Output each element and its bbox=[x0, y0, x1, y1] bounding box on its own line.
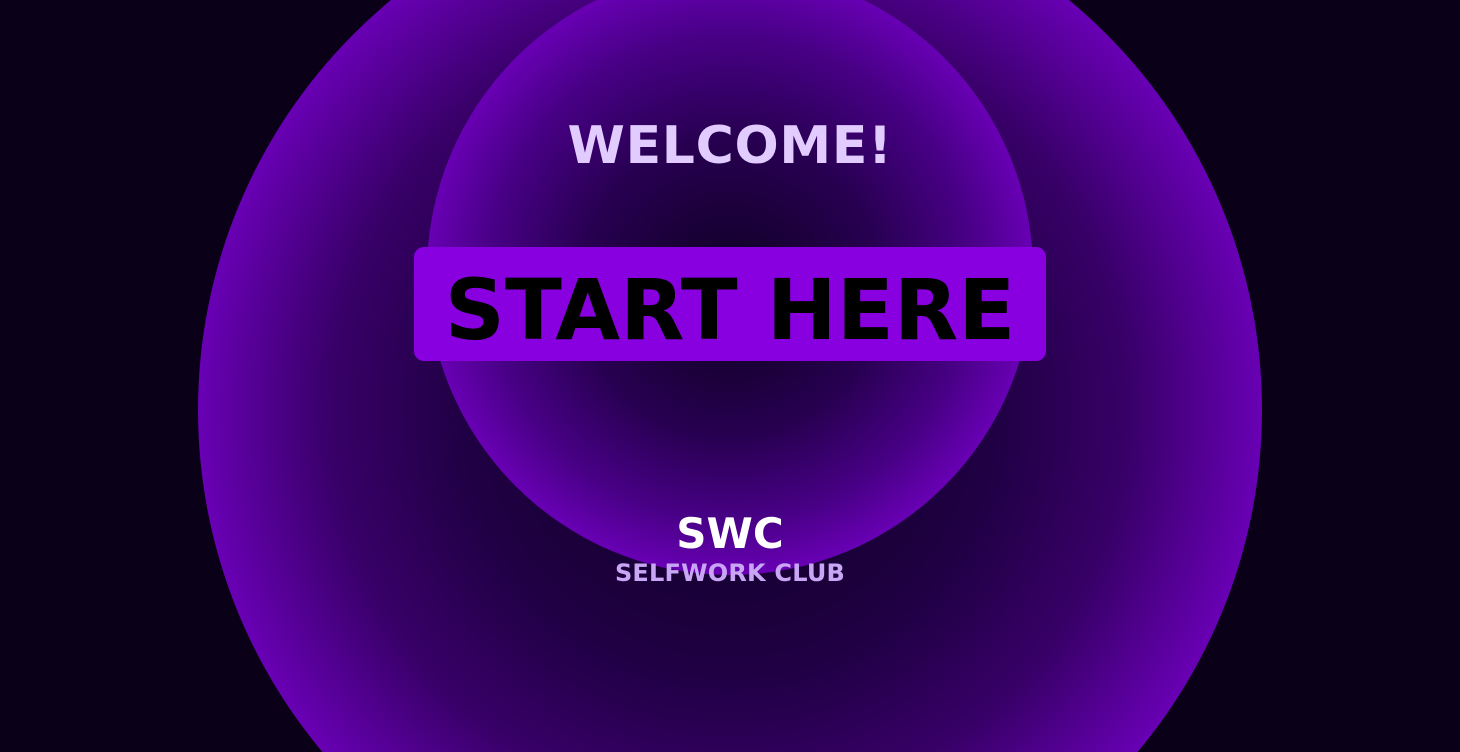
start here banner bbox=[414, 247, 1046, 361]
heading: welcome: WELCOME! bbox=[568, 116, 892, 176]
brand subtitle: SELFWORK CLUB bbox=[615, 559, 845, 587]
inner glow circle bbox=[427, 0, 1033, 575]
banner text: START HERE bbox=[445, 261, 1015, 359]
brand name: SWC bbox=[676, 509, 784, 558]
outer glow circle bbox=[198, 0, 1262, 752]
